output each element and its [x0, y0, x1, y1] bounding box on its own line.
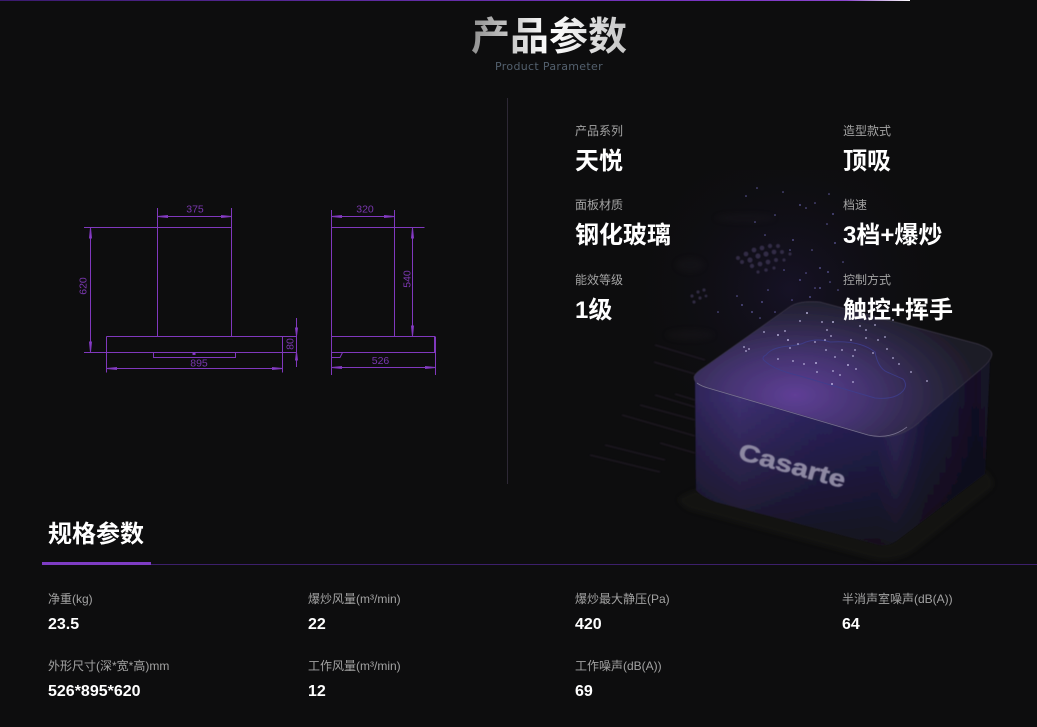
- box brand wordmark: Casarte: [735, 439, 849, 494]
- text: 外形尺寸(深*宽*高)mm: [48, 659, 169, 673]
- dimension labels: 620: [78, 277, 90, 295]
- text: 触控+挥手: [843, 297, 953, 324]
- parameter: panel material: [575, 198, 671, 249]
- section heading: 规格参数: [48, 521, 144, 548]
- text: 64: [842, 616, 860, 633]
- title: 产品参数: [471, 16, 627, 59]
- spec: dimensions: [48, 659, 169, 700]
- dimension labels: 895: [190, 358, 208, 370]
- parameter: energy grade: [575, 273, 623, 324]
- text: 420: [575, 616, 602, 633]
- subtitle: Product Parameter: [495, 60, 603, 73]
- vertical divider: [507, 98, 508, 484]
- parameter: product series: [575, 124, 623, 175]
- text: 钢化玻璃: [575, 222, 671, 249]
- text: 23.5: [48, 616, 79, 633]
- side view: [332, 210, 436, 375]
- text: 12: [308, 683, 326, 700]
- text: 半消声室噪声(dB(A)): [842, 592, 953, 606]
- spec: working airflow: [308, 659, 401, 700]
- text: 产品系列: [575, 124, 623, 138]
- spec: net weight: [48, 592, 93, 633]
- text: 净重(kg): [48, 592, 93, 606]
- spec: working noise: [575, 659, 662, 700]
- text: 天悦: [575, 148, 623, 175]
- halftone dot patch: [690, 244, 792, 304]
- spec: stir-fry airflow: [308, 592, 401, 633]
- cloud outline on box: [763, 340, 906, 398]
- dimension labels: 375: [186, 204, 204, 216]
- text: 1级: [575, 297, 612, 324]
- text: 能效等级: [575, 273, 623, 287]
- dimension labels: 526: [372, 355, 389, 367]
- dimension labels: 320: [356, 204, 374, 216]
- text: 69: [575, 683, 593, 700]
- parameter: control mode: [843, 273, 953, 324]
- text: 控制方式: [843, 273, 891, 287]
- section rule: [42, 562, 1037, 565]
- particles: [743, 312, 928, 385]
- text: 面板材质: [575, 198, 623, 212]
- box body: [695, 360, 990, 545]
- dimension labels: [78, 204, 414, 370]
- text: 526*895*620: [48, 683, 141, 700]
- dimension labels: 540: [402, 270, 414, 288]
- base platform: [679, 470, 993, 560]
- text: 工作风量(m³/min): [308, 659, 401, 673]
- text: 爆炒风量(m³/min): [308, 592, 401, 606]
- text: 3档+爆炒: [843, 222, 942, 249]
- text: 造型款式: [843, 124, 891, 138]
- parameter: shape style: [843, 124, 891, 175]
- text: 顶吸: [843, 148, 891, 175]
- dimension drawing: [78, 204, 436, 375]
- spec: anechoic noise: [842, 592, 953, 633]
- spec: max static pressure: [575, 592, 670, 633]
- front view: [84, 208, 298, 372]
- dimension labels: 80: [284, 338, 296, 350]
- text: 爆炒最大静压(Pa): [575, 592, 670, 606]
- box top face: [694, 302, 992, 437]
- text: 档速: [843, 198, 867, 212]
- text: 22: [308, 616, 326, 633]
- parameter: speed: [843, 198, 942, 249]
- top gradient bar: [0, 0, 910, 1]
- text: 工作噪声(dB(A)): [575, 659, 662, 673]
